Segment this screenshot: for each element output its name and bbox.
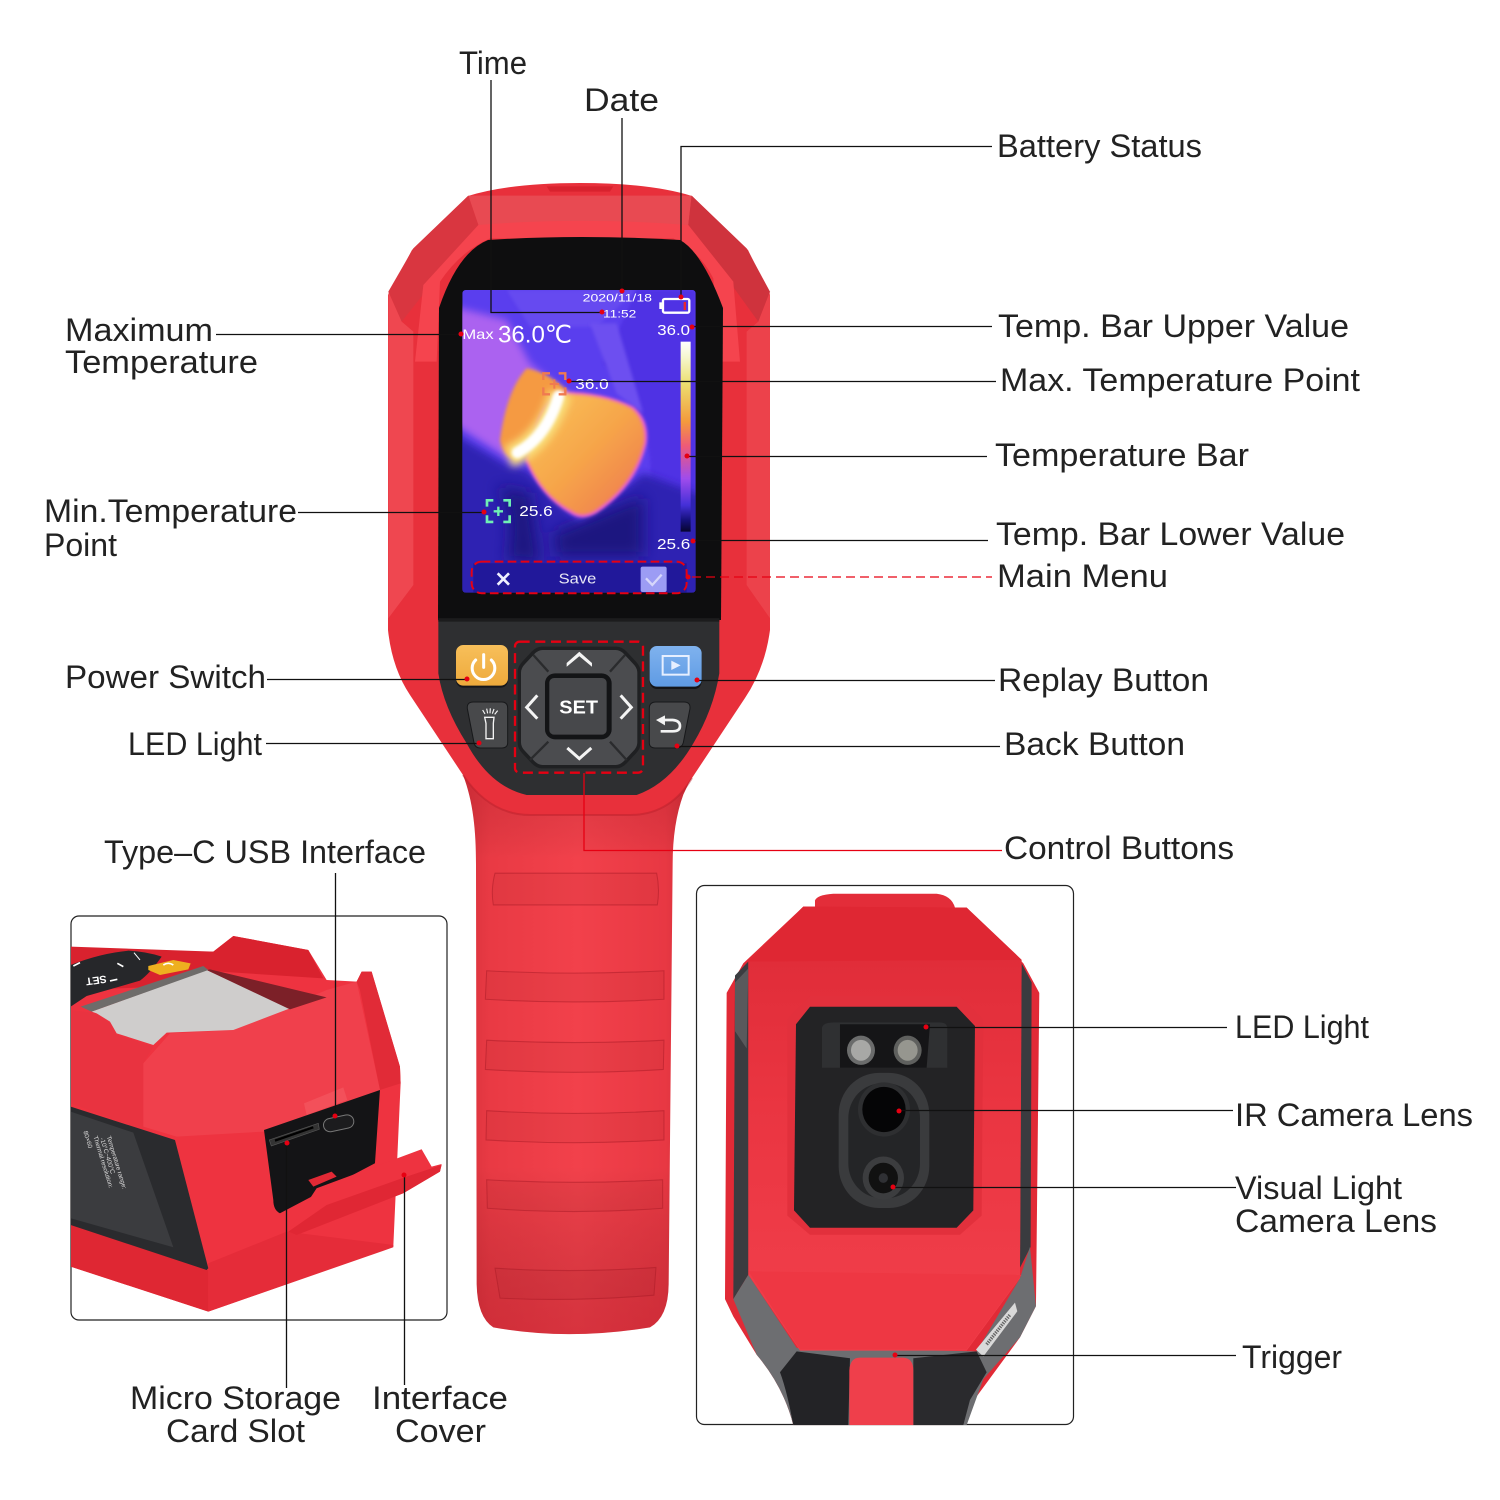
lens housing [839,1073,929,1208]
back label strip [71,1107,208,1270]
device bottom view: Thermal resolution: [91,1135,114,1189]
on-screen labels: 36.0℃ [498,321,572,348]
labels: camera panel: Visual Light [1235,1170,1402,1206]
visual light camera lens [863,1156,904,1200]
leader lines and dots [216,80,1236,1388]
trigger [849,1358,913,1425]
USB-C port [322,1114,355,1133]
thermal screen image [453,290,707,600]
port cavity [264,1090,380,1213]
on-screen labels: 36.0 [575,376,609,393]
device bottom view: SET [85,972,107,987]
labels: top [459,45,659,118]
labels: right column: Temp. Bar Upper Value [998,308,1349,344]
labels: USB panel: Type–C USB Interface [104,834,426,870]
keypad panel [438,618,719,795]
labels: USB panel: Micro Storage [130,1380,341,1416]
on-screen labels [462,292,690,588]
labels: left column: Maximum [65,312,213,348]
LED lights [847,1036,922,1065]
labels: right column: Main Menu [997,558,1168,594]
on-screen labels: 11:52 [603,308,636,320]
on-screen labels: Max [462,326,494,342]
panel: rear camera detail [696,886,1074,1425]
LED light button [467,702,508,748]
labels: camera panel: IR Camera Lens [1235,1097,1473,1133]
keypad [71,951,162,1007]
rear red plate [748,907,1022,1351]
labels: right column: Back Button [1004,726,1185,762]
screen bezel [438,237,723,620]
labels: right column: Control Buttons [1004,830,1234,866]
labels: right column: Temp. Bar Lower Value [996,516,1345,552]
on-screen labels: 2020/11/18 [583,292,652,304]
main device: thermal imager front view [388,183,770,1334]
on-screen labels: 25.6 [657,536,690,553]
labels: USB panel: Card Slot [166,1413,305,1449]
labels: left column: Temperature [65,344,258,380]
labels: left column [44,312,297,762]
labels: camera panel: Camera Lens [1235,1203,1437,1239]
device bottom view: Temperature range: [105,1135,128,1190]
main menu bar [472,562,687,593]
card slot [269,1123,319,1146]
back button [649,702,690,748]
camera plate [794,1007,975,1228]
min temperature marker [487,500,510,522]
battery icon [659,299,689,313]
labels: camera panel: Trigger [1242,1339,1342,1375]
screen face [92,970,290,1045]
labels: camera panel: LED Light [1235,1009,1369,1045]
directional pad [518,647,641,768]
IR camera lens [858,1082,910,1137]
labels: USB panel [104,834,508,1449]
device handle [463,775,693,1334]
on-screen labels: Save [559,571,596,588]
device rear view [725,894,1039,1425]
directional pad: SET [559,697,599,718]
labels: top: Time [459,45,527,81]
control buttons dashed outline [515,642,643,773]
temperature colour bar [681,342,691,532]
labels: left column: Min.Temperature [44,493,297,529]
labels: top: Date [584,82,659,118]
serial label [976,1303,1017,1357]
labels: right column [995,128,1360,866]
labels: right column: Battery Status [997,128,1202,164]
replay button [650,646,702,689]
device bottom view [71,936,442,1312]
labels: USB panel: Interface [372,1380,508,1416]
panel: USB and card slot detail [71,916,447,1320]
power button [456,645,508,688]
device bottom view: -10°C~400°C [98,1137,117,1175]
on-screen labels: 25.6 [519,503,553,520]
labels: right column: Replay Button [998,662,1209,698]
labels: camera panel [1235,1009,1473,1375]
labels: USB panel: Cover [395,1413,486,1449]
device bottom view: 80×60 [81,1130,93,1150]
on-screen labels: 36.0 [657,322,690,339]
max temperature marker [543,373,565,394]
labels: left column: Power Switch [65,659,266,695]
interface cover [288,1149,442,1235]
labels: left column: Point [44,527,117,563]
labels: right column: Max. Temperature Point [1000,362,1360,398]
labels: right column: Temperature Bar [995,437,1249,473]
labels: left column: LED Light [128,726,262,762]
device head housing [388,183,770,815]
